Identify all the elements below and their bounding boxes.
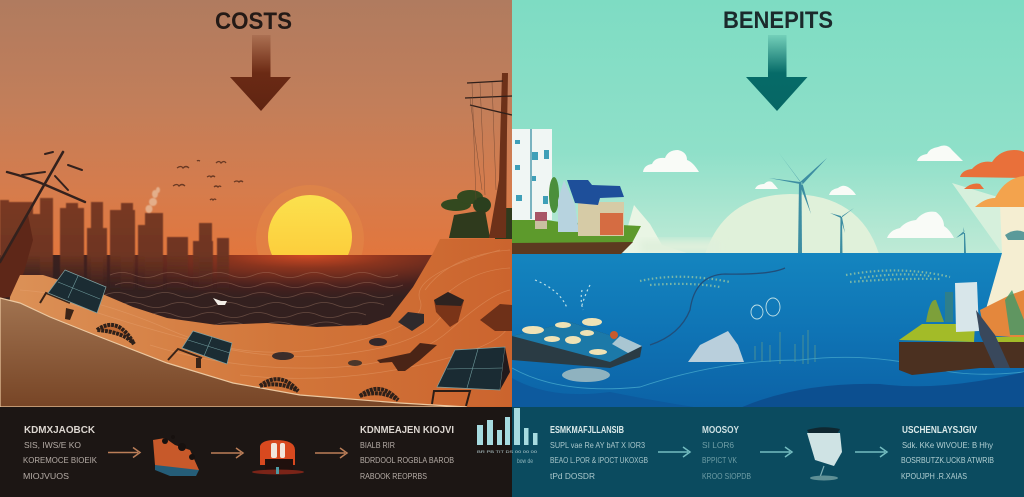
arrow: benefits step two: [760, 447, 792, 457]
panel: costs scene: [0, 0, 512, 407]
broken power pole: [0, 152, 85, 262]
right beam and volcano: [952, 183, 1024, 338]
text block: benefits column two: BPPICT VK: [702, 455, 737, 465]
text block: benefits column three: BOSRBUTZK.UCKB ATWRIB: [901, 455, 994, 465]
text block: costs column one: MIOJVUOS: [23, 471, 69, 481]
bar chart: bow de: [517, 459, 534, 465]
solar panel one: [40, 270, 106, 320]
sunset sky: [0, 0, 512, 256]
arrow: costs step one: [108, 448, 140, 458]
pale horizon glow: [620, 194, 879, 254]
clouds: [643, 146, 963, 238]
text block: benefits column one: BEAO L.POR & IPOCT UKOXGB: [550, 455, 648, 465]
sand strata lines: [20, 250, 510, 378]
panel: benefits scene: [512, 0, 1024, 408]
left ruined wall: [0, 215, 33, 298]
text block: benefits column three: Sdk. KKe WIVOUE: B Hhy: [902, 440, 994, 450]
costs bottom band: [0, 407, 512, 497]
text block: costs column two: BDRDOOL ROGBLA BAROB: [360, 455, 454, 465]
text block: benefits column two: MOOSOY: [702, 425, 739, 436]
icon: red device: [252, 440, 304, 474]
smoke plume: [146, 187, 160, 213]
sea waves: [105, 272, 403, 326]
right cliff bush: [441, 190, 512, 239]
bar chart: [477, 408, 538, 465]
underwater cable: [650, 268, 785, 345]
seaweed: [755, 330, 815, 364]
seabird on water: [213, 298, 227, 305]
arrow: costs step two: [211, 448, 243, 458]
ocean: [512, 253, 1024, 408]
bubble trails: [535, 280, 590, 310]
text block: costs column one: KOREMOCE BIOEIK: [23, 455, 97, 465]
solar panel two: [168, 331, 232, 368]
island with town: [512, 129, 641, 254]
orange clouds: [960, 150, 1024, 207]
text block: costs column two: KDNMEAJEN KIOJVI: [360, 425, 454, 436]
text block: benefits column three: [901, 425, 994, 481]
dark sea: [0, 255, 432, 327]
text block: benefits column two: [702, 425, 751, 481]
arrow: benefits down: [746, 35, 808, 111]
text block: benefits column one: tPd DOSDR: [550, 471, 595, 481]
bar chart: BR PB TIT DS 00 00 00: [477, 449, 538, 454]
rocks and pits: [272, 292, 512, 371]
wind turbines: [769, 153, 966, 254]
text block: benefits column two: SI LOR6: [702, 440, 734, 450]
arrow: costs down: [230, 35, 291, 111]
tan foreground slope: [0, 298, 467, 407]
text block: benefits column one: ESMKMAFJLLANSIB: [550, 425, 624, 436]
arrow: benefits step one: [658, 447, 690, 457]
text block: costs column one: [23, 425, 97, 481]
text block: costs column two: RABOOK REOPRBS: [360, 471, 427, 481]
floating island with forest: [899, 282, 1024, 375]
icon: white screen: [807, 427, 842, 480]
text block: benefits column three: KPOUJPH .R.XAIAS: [901, 471, 967, 481]
text block: benefits column one: [550, 425, 648, 481]
sun: [256, 185, 364, 255]
craters: [97, 325, 398, 400]
iceberg: [688, 331, 744, 362]
text block: benefits column two: KROO SIOPDB: [702, 471, 751, 481]
sand hillside: [0, 238, 512, 407]
arrow: benefits step three: [855, 447, 887, 457]
ruined city skyline: [0, 198, 229, 292]
text block: benefits column three: USCHENLAYSJGIV: [902, 425, 977, 436]
sea plankton dots: [640, 270, 950, 287]
icon: cracked earth: [153, 435, 199, 476]
bubbles: [751, 298, 780, 319]
text block: costs column one: KDMXJAOBCK: [24, 425, 96, 436]
text block: benefits column one: SUPL vae Re AY bAT X IOR3: [550, 440, 645, 450]
teal sky: [512, 0, 1024, 254]
text block: costs column one: SIS, IWS/E KO: [24, 440, 81, 450]
submerged solar platform: [512, 318, 642, 382]
solar panel three: [432, 347, 510, 406]
benefits bottom band: [512, 407, 1024, 497]
heading: costs: COSTS: [215, 8, 292, 35]
text block: costs column two: BIALB RIR: [360, 440, 395, 450]
birds: [173, 160, 243, 200]
arrow: costs step three: [315, 448, 347, 458]
heading: benefits: BENEPITS: [723, 7, 833, 34]
text block: costs column two: [360, 425, 454, 481]
ocean bottom waves: [512, 357, 1024, 408]
standing power pole: [465, 73, 512, 238]
